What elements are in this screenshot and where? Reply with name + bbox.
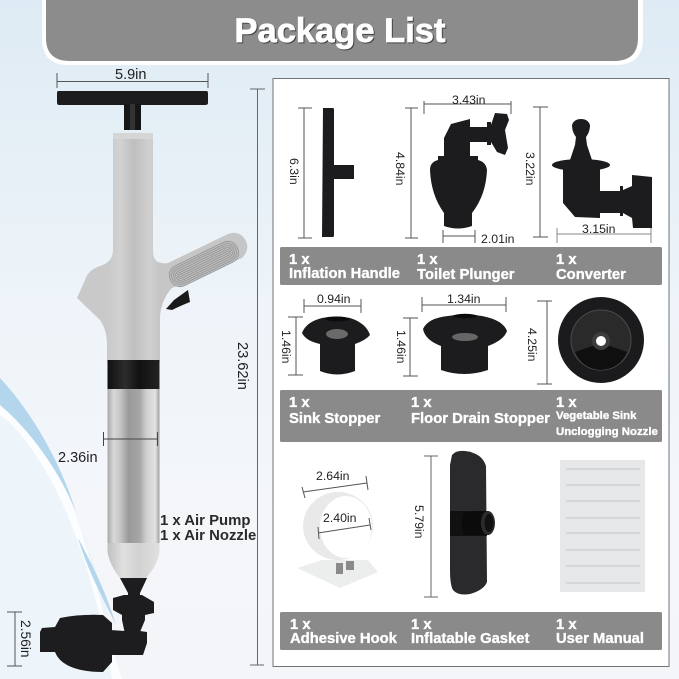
icon: vegetable sink nozzle: 4.25in bbox=[525, 328, 539, 362]
t-handle bbox=[57, 91, 208, 105]
handle width dimension: 5.9in bbox=[115, 67, 146, 83]
icon: floor drain stopper bbox=[394, 292, 507, 376]
height dimension bbox=[234, 89, 265, 665]
label bar: row 1: 1 x bbox=[289, 252, 310, 268]
height dimension: 23.62in bbox=[234, 342, 250, 390]
label bar: row 2: 1 x bbox=[411, 395, 432, 411]
icon: converter: 3.22in bbox=[523, 152, 537, 186]
air pump label: 1 x Air Nozzle bbox=[160, 528, 256, 544]
icon: adhesive hook: 2.40in bbox=[323, 511, 357, 525]
label bar: row 2: 1 x bbox=[289, 395, 310, 411]
label bar: row 1: Converter bbox=[556, 267, 626, 283]
label bar: row 3: Inflatable Gasket bbox=[411, 631, 529, 647]
nozzle height dimension: 2.56in bbox=[18, 620, 33, 658]
icon: inflation handle: 6.3in bbox=[287, 158, 301, 185]
panel: package list bbox=[273, 78, 669, 666]
title banner bbox=[42, 0, 643, 65]
label bar: row 3: 1 x bbox=[411, 617, 432, 633]
label bar: row 2: Unclogging Nozzle bbox=[556, 426, 658, 438]
label bar: row 3: User Manual bbox=[556, 631, 644, 647]
icon: user manual bbox=[560, 460, 645, 592]
icon: floor drain stopper: 1.34in bbox=[447, 292, 481, 306]
label bar: row 1: 1 x bbox=[417, 252, 438, 268]
icon: inflation handle bbox=[287, 108, 354, 238]
icon: converter: 3.15in bbox=[582, 222, 616, 236]
icon: sink stopper bbox=[279, 292, 370, 375]
icon: vegetable sink nozzle bbox=[525, 297, 644, 384]
label bar: row 2 bbox=[280, 390, 662, 442]
arm grip bbox=[166, 238, 242, 290]
black band bbox=[108, 360, 160, 389]
air pump label: 1 x Air Pump bbox=[160, 513, 250, 529]
diameter dimension bbox=[58, 432, 158, 466]
label bar: row 3: 1 x bbox=[556, 617, 577, 633]
label bar: row 2: 1 x bbox=[556, 395, 577, 411]
icon: sink stopper: 0.94in bbox=[317, 292, 351, 306]
label bar: row 1 bbox=[280, 247, 662, 285]
grey body bbox=[77, 133, 247, 361]
air pump label bbox=[160, 513, 256, 544]
label bar: row 2: Vegetable Sink bbox=[556, 410, 637, 422]
label bar: row 1: Inflation Handle bbox=[289, 266, 400, 282]
silver tube bbox=[108, 389, 160, 543]
handle width dimension bbox=[57, 67, 208, 88]
icon: toilet plunger: 3.43in bbox=[452, 93, 486, 107]
tube cone bbox=[108, 543, 160, 578]
trigger bbox=[166, 290, 190, 310]
air pump bbox=[40, 91, 247, 672]
label bar: row 1: 1 x bbox=[556, 252, 577, 268]
label bar: row 2: Floor Drain Stopper bbox=[411, 411, 550, 427]
nozzle height dimension bbox=[7, 612, 33, 666]
label bar: row 3 bbox=[280, 612, 662, 650]
icon: inflatable gasket bbox=[412, 451, 495, 597]
nozzle connector bbox=[40, 578, 154, 672]
label bar: row 3: 1 x bbox=[290, 617, 311, 633]
icon: inflatable gasket: 5.79in bbox=[412, 505, 426, 539]
label bar: row 3: Adhesive Hook bbox=[290, 631, 398, 647]
icon: adhesive hook bbox=[297, 469, 378, 588]
title shadow: Package List bbox=[236, 13, 447, 51]
diameter dimension: 2.36in bbox=[58, 450, 98, 466]
icon: converter bbox=[523, 107, 652, 243]
label bar: row 1: Toilet Plunger bbox=[417, 267, 515, 283]
icon: toilet plunger: 2.01in bbox=[481, 232, 515, 246]
icon: floor drain stopper: 1.46in bbox=[394, 330, 408, 364]
icon: adhesive hook: 2.64in bbox=[316, 469, 350, 483]
icon: sink stopper: 1.46in bbox=[279, 330, 293, 364]
label bar: row 2: Sink Stopper bbox=[289, 411, 381, 427]
icon: toilet plunger: 4.84in bbox=[393, 152, 407, 186]
icon: toilet plunger bbox=[393, 93, 515, 246]
title: Package List bbox=[235, 12, 446, 50]
